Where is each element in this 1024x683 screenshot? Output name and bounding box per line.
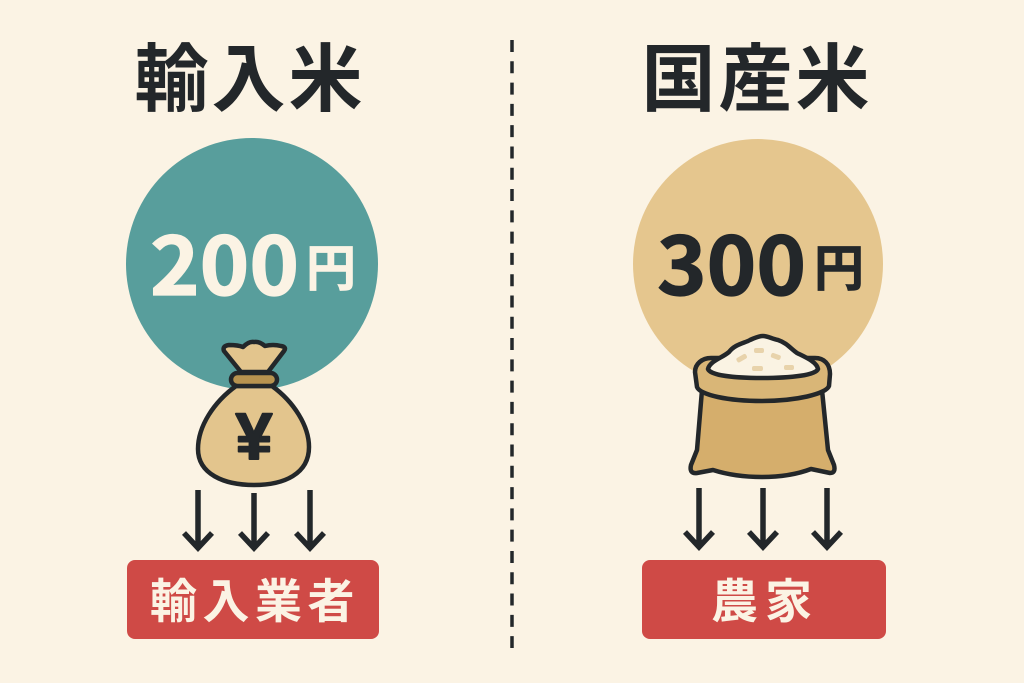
label: farmer bbox=[642, 560, 886, 639]
heading: imported rice: 輸入米 bbox=[134, 38, 366, 121]
icon: money bag bbox=[198, 342, 309, 485]
price circle: 300 yen bbox=[633, 139, 883, 389]
panel: imported rice bbox=[126, 38, 379, 639]
arrows: imported rice bbox=[184, 490, 324, 548]
price circle: 300 yen: 300 bbox=[657, 203, 806, 319]
label: importer: 輸入業者 bbox=[150, 575, 360, 628]
price circle: 300 yen: 円 bbox=[814, 241, 864, 297]
icon: money bag: ¥ bbox=[236, 399, 273, 473]
label: importer bbox=[127, 560, 379, 639]
label: farmer: 農家 bbox=[711, 575, 819, 628]
heading: domestic rice: 国産米 bbox=[642, 38, 872, 121]
icon: rice sack bbox=[691, 336, 834, 477]
price circle: 200 yen bbox=[126, 138, 378, 390]
arrows: domestic rice bbox=[685, 488, 841, 547]
price circle: 200 yen: 円 bbox=[306, 241, 356, 297]
panel: domestic rice bbox=[633, 38, 886, 639]
price circle: 200 yen: 200 bbox=[150, 203, 299, 319]
